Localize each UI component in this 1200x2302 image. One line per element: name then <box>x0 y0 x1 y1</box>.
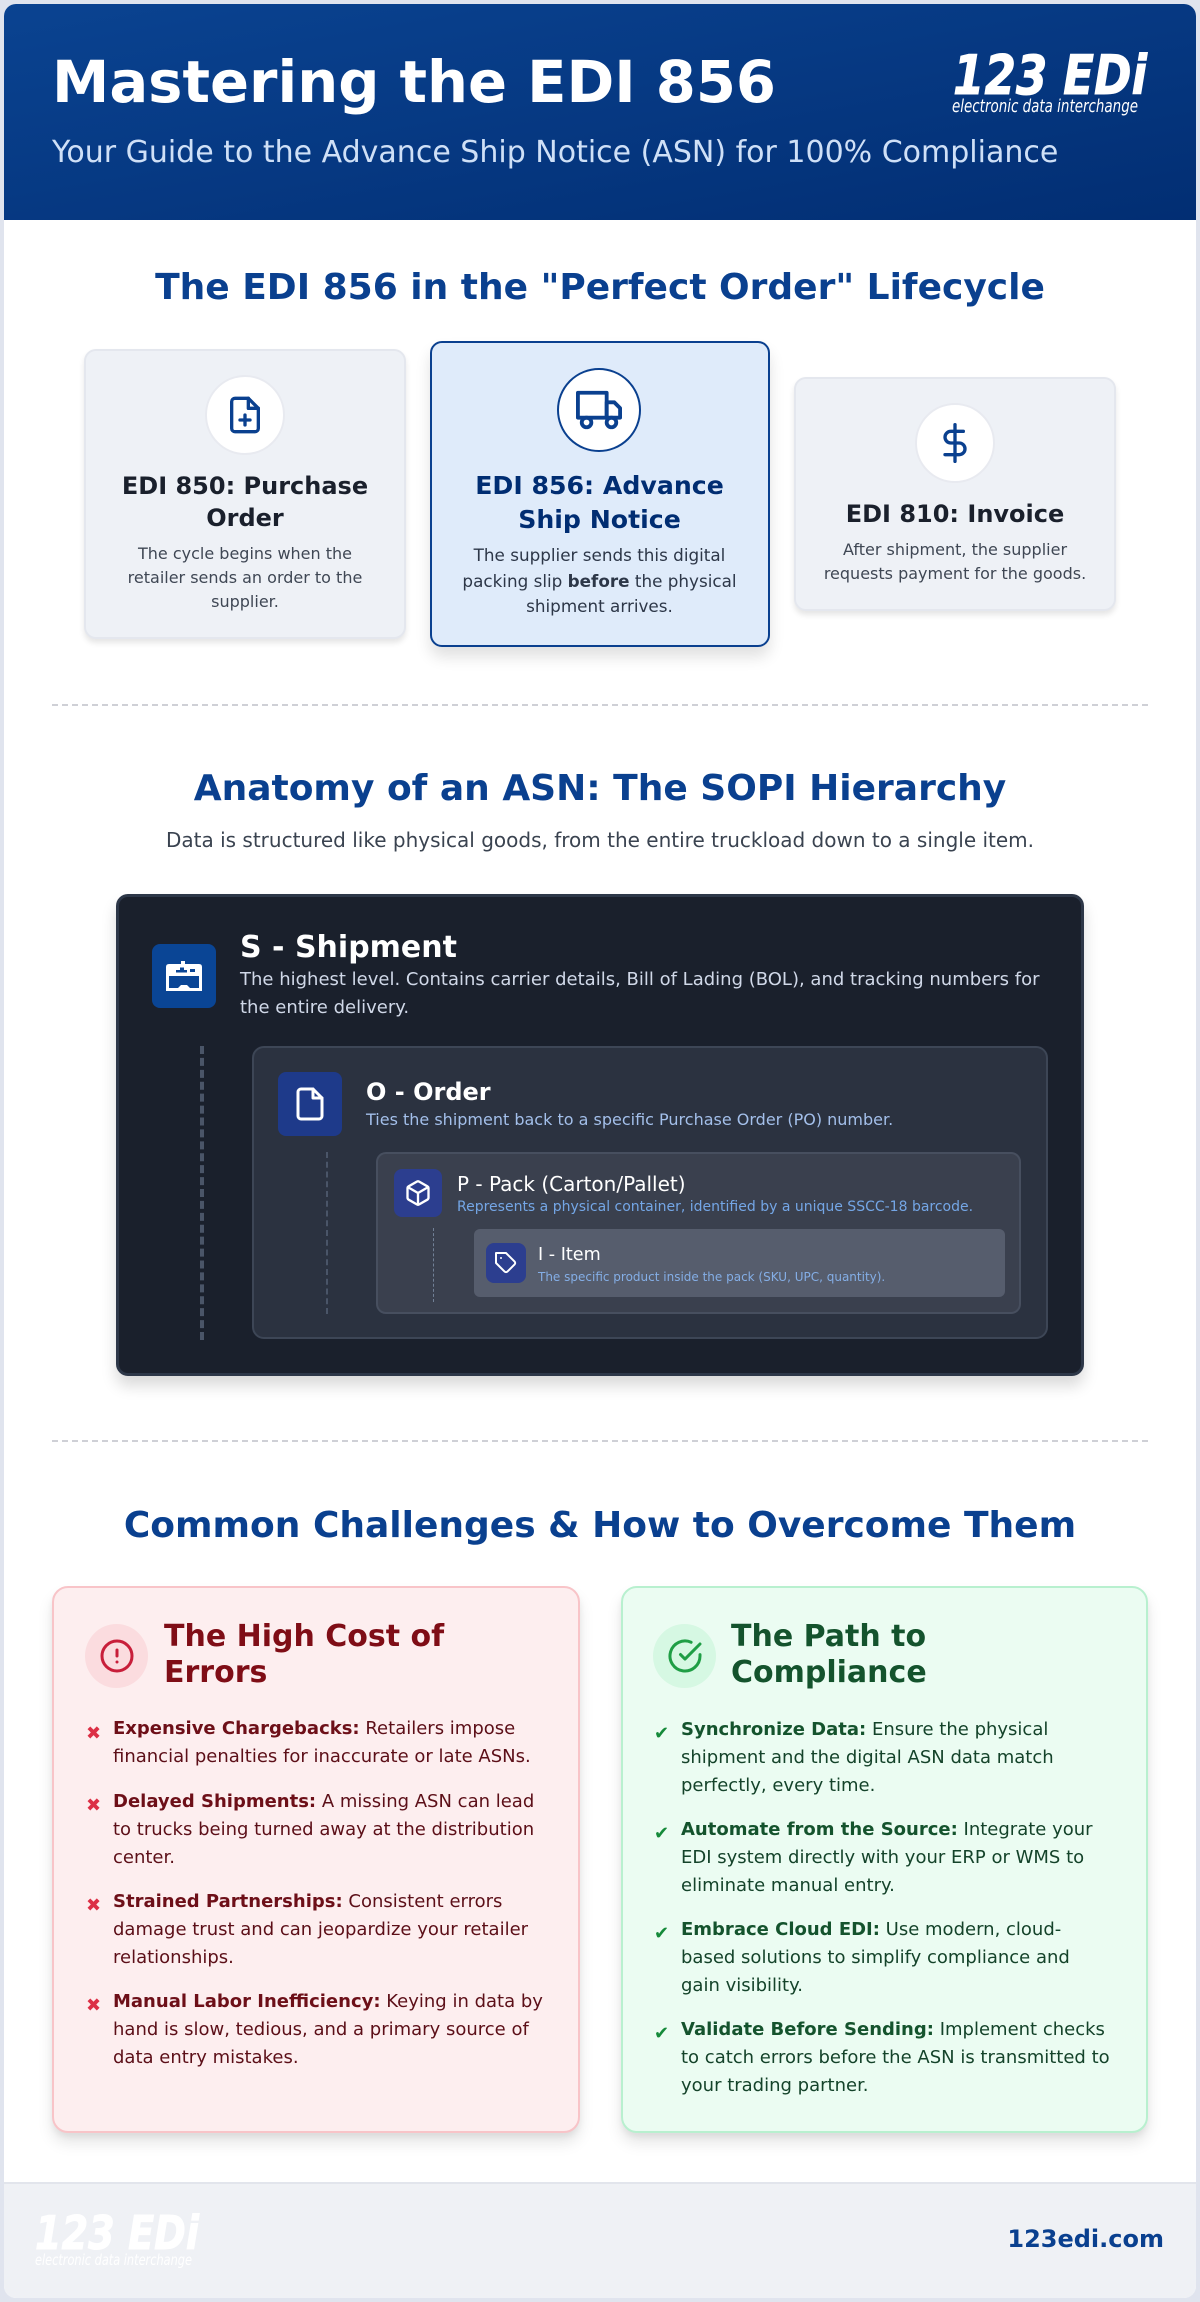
item: Validate Before Sending: Implement checks <box>681 2018 1105 2040</box>
header banner <box>4 4 1196 220</box>
item: your trading partner. <box>681 2074 869 2096</box>
panel: errors <box>52 1586 580 2133</box>
card text: supplier. <box>211 592 279 611</box>
panel: order <box>252 1046 1048 1339</box>
item: Expensive Chargebacks: Retailers impose <box>113 1718 515 1739</box>
item <box>681 1918 1070 1996</box>
item: gain visibility. <box>681 1974 803 1996</box>
icon: item tag <box>486 1243 526 1283</box>
compliance list <box>654 1718 1110 2096</box>
icon: check circle <box>653 1624 716 1688</box>
compliance title: Compliance <box>731 1655 927 1690</box>
item: relationships. <box>113 1947 234 1968</box>
errors title: The High Cost of <box>164 1619 444 1654</box>
pack title: P - Pack (Carton/Pallet) <box>457 1172 686 1196</box>
item: Synchronize Data: Ensure the physical <box>681 1718 1048 1740</box>
card title: EDI 810: Invoice <box>846 500 1064 528</box>
card text: shipment arrives. <box>526 596 673 616</box>
item: Strained Partnerships: Consistent errors <box>113 1891 502 1912</box>
errors title <box>164 1619 444 1690</box>
logo: footer: electronic data interchange <box>35 2251 192 2269</box>
item: shipment and the digital ASN data match <box>681 1746 1054 1768</box>
icon: truck <box>557 368 641 452</box>
item: Delayed Shipments: A missing ASN can lead <box>113 1791 534 1812</box>
item title: I - Item <box>538 1245 601 1265</box>
footer url: 123edi.com <box>1007 2225 1164 2253</box>
card text: The cycle begins when the <box>138 544 352 563</box>
card text <box>128 544 362 611</box>
icon: alert circle <box>85 1624 148 1688</box>
item <box>681 2018 1110 2096</box>
card title: Ship Notice <box>518 505 681 534</box>
dashed connector P <box>433 1228 434 1302</box>
icon: pack box <box>394 1169 442 1217</box>
compliance title: The Path to <box>731 1619 926 1654</box>
marker: ✔ <box>654 1723 669 1744</box>
card text: retailer sends an order to the <box>128 568 362 587</box>
card title <box>475 471 724 534</box>
item <box>113 1891 528 1968</box>
panel: pack <box>376 1152 1021 1314</box>
marker: ✖ <box>86 1723 101 1744</box>
card text: After shipment, the supplier <box>843 540 1067 559</box>
item: perfectly, every time. <box>681 1774 875 1796</box>
panel: item <box>474 1229 1005 1297</box>
marker: ✖ <box>86 1795 101 1816</box>
shipment text: the entire delivery. <box>240 997 409 1018</box>
item: center. <box>113 1847 175 1868</box>
marker: ✔ <box>654 1823 669 1844</box>
errors title: Errors <box>164 1655 267 1690</box>
marker: ✖ <box>86 1895 101 1916</box>
card title <box>122 472 368 532</box>
item: Manual Labor Inefficiency: Keying in data by <box>113 1991 543 2012</box>
card text <box>824 540 1086 583</box>
compliance title <box>731 1619 927 1690</box>
item <box>681 1818 1093 1896</box>
pack text: Represents a physical container, identified by a unique SSCC-18 barcode. <box>457 1199 973 1215</box>
section heading: lifecycle: The EDI 856 in the "Perfect Order" Lifecycle <box>155 267 1045 308</box>
card: EDI 810 <box>794 377 1116 611</box>
marker: ✔ <box>654 1923 669 1944</box>
card title: EDI 856: Advance <box>475 471 724 500</box>
icon: file plus <box>205 375 285 455</box>
item text: The specific product inside the pack (SKU, UPC, quantity). <box>538 1270 885 1284</box>
order text: Ties the shipment back to a specific Purchase Order (PO) number. <box>366 1110 893 1129</box>
card: EDI 850 <box>84 349 406 639</box>
item <box>681 1718 1054 1796</box>
item: hand is slow, tedious, and a primary source of <box>113 2019 529 2040</box>
card title: EDI 850: Purchase <box>122 472 368 500</box>
icon: order file <box>278 1072 342 1136</box>
item: financial penalties for inaccurate or late ASNs. <box>113 1746 531 1767</box>
item: to catch errors before the ASN is transmitted to <box>681 2046 1110 2068</box>
item: damage trust and can jeopardize your retailer <box>113 1919 528 1940</box>
card title: Order <box>206 504 284 532</box>
panel: SOPI hierarchy <box>116 894 1084 1376</box>
title: Mastering the EDI 856 <box>52 49 776 116</box>
marker: ✖ <box>86 1995 101 2016</box>
icon: dollar sign <box>915 403 995 483</box>
section intro text: Data is structured like physical goods, from the entire truckload down to a single item. <box>166 828 1034 852</box>
item <box>113 1791 534 1868</box>
item: data entry mistakes. <box>113 2047 299 2068</box>
footer <box>4 2182 1196 2298</box>
marker: ✔ <box>654 2023 669 2044</box>
item: Automate from the Source: Integrate your <box>681 1818 1093 1840</box>
shipment title: S - Shipment <box>240 930 457 965</box>
logo: 123 EDI: 123 EDi <box>953 44 1148 107</box>
item: to trucks being turned away at the distribution <box>113 1819 534 1840</box>
dashed connector S <box>200 1046 204 1340</box>
card: EDI 856 highlighted <box>430 341 770 647</box>
section heading: anatomy: Anatomy of an ASN: The SOPI Hierarchy <box>194 768 1006 809</box>
shipment text: The highest level. Contains carrier details, Bill of Lading (BOL), and tracking numbers for <box>240 969 1039 990</box>
icon: shipment <box>152 944 216 1008</box>
shipment text <box>240 969 1040 1018</box>
errors list <box>86 1718 543 2068</box>
item: based solutions to simplify compliance and <box>681 1946 1070 1968</box>
card text: The supplier sends this digital <box>474 545 725 565</box>
logo: footer: 123 EDi <box>35 2206 200 2260</box>
section heading: challenges: Common Challenges & How to Overcome Them <box>124 1505 1076 1546</box>
item <box>113 1718 531 1767</box>
card text: packing slip before the physical <box>462 570 737 590</box>
item: eliminate manual entry. <box>681 1874 895 1896</box>
card text <box>462 545 737 616</box>
logo: 123 EDI: electronic data interchange <box>952 96 1138 117</box>
item <box>113 1991 543 2068</box>
panel: compliance <box>620 1586 1148 2133</box>
card text: requests payment for the goods. <box>824 564 1086 583</box>
subtitle: Your Guide to the Advance Ship Notice (ASN) for 100% Compliance <box>52 135 1058 170</box>
item: Embrace Cloud EDI: Use modern, cloud- <box>681 1918 1061 1940</box>
dashed connector O <box>326 1152 328 1314</box>
item: EDI system directly with your ERP or WMS to <box>681 1846 1084 1868</box>
order title: O - Order <box>366 1078 491 1106</box>
